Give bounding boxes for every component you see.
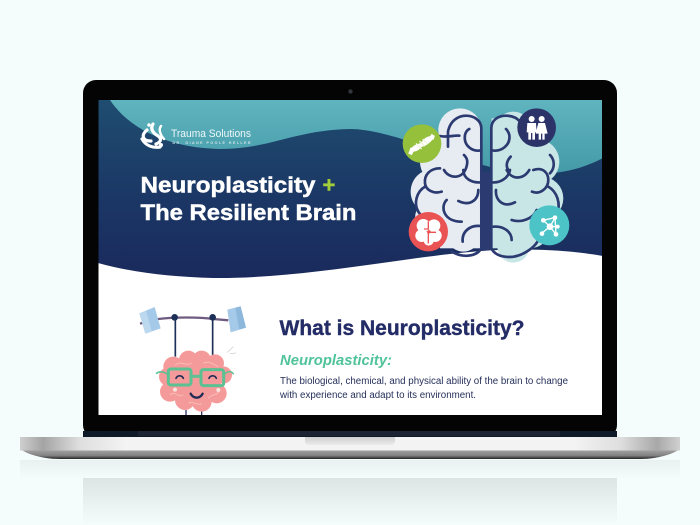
cheek right bbox=[216, 388, 220, 392]
arms bbox=[175, 318, 213, 357]
laptop base bbox=[20, 437, 680, 459]
brain body bbox=[159, 351, 232, 412]
hinge notch bbox=[305, 437, 395, 445]
header navy background bbox=[98, 100, 603, 278]
title: Neuroplasticity bbox=[140, 172, 316, 198]
definition text: with experience and adapt to its environment. bbox=[279, 390, 476, 401]
icon: puzzle brain bbox=[409, 212, 448, 251]
laptop bezel bbox=[83, 80, 617, 438]
webcam bbox=[348, 89, 353, 94]
cartoon brain lifting barbell bbox=[139, 306, 246, 417]
logo tagline: DR. DIANE POOLE HELLER bbox=[172, 141, 251, 145]
brain center stem bbox=[482, 172, 490, 250]
glasses bbox=[156, 369, 234, 386]
icon: network bbox=[529, 205, 569, 245]
laptop reflection bbox=[20, 460, 680, 525]
logo: Trauma Solutions bbox=[142, 123, 252, 147]
logo wordmark: Trauma Solutions bbox=[171, 128, 252, 140]
brain blobs bbox=[411, 108, 563, 263]
screen bbox=[98, 100, 603, 417]
icon: people bbox=[517, 108, 556, 147]
barbell bbox=[139, 306, 246, 334]
logo swirl mark bbox=[142, 123, 164, 147]
definition text bbox=[279, 376, 568, 401]
teal wave bbox=[110, 100, 603, 174]
brain illustration with icons bbox=[403, 108, 569, 263]
laptop mockup illustration bbox=[20, 80, 680, 509]
title: The Resilient Brain bbox=[140, 200, 356, 225]
smile bbox=[191, 394, 203, 398]
legs bbox=[185, 410, 202, 415]
brain folds bbox=[170, 362, 220, 404]
title bbox=[140, 176, 356, 220]
heading: What is Neuroplasticity?: What is Neuroplasticity? bbox=[280, 316, 524, 340]
icon: DNA bbox=[403, 124, 441, 163]
eyes bbox=[176, 376, 216, 378]
brain outlines bbox=[416, 116, 559, 257]
subheading: Neuroplasticity: Neuroplasticity: bbox=[280, 352, 392, 369]
motion lines bbox=[227, 347, 236, 354]
cheeks bbox=[173, 388, 177, 392]
definition text: The biological, chemical, and physical ability of the brain to change bbox=[280, 376, 568, 387]
green plus sign: + bbox=[322, 172, 335, 198]
